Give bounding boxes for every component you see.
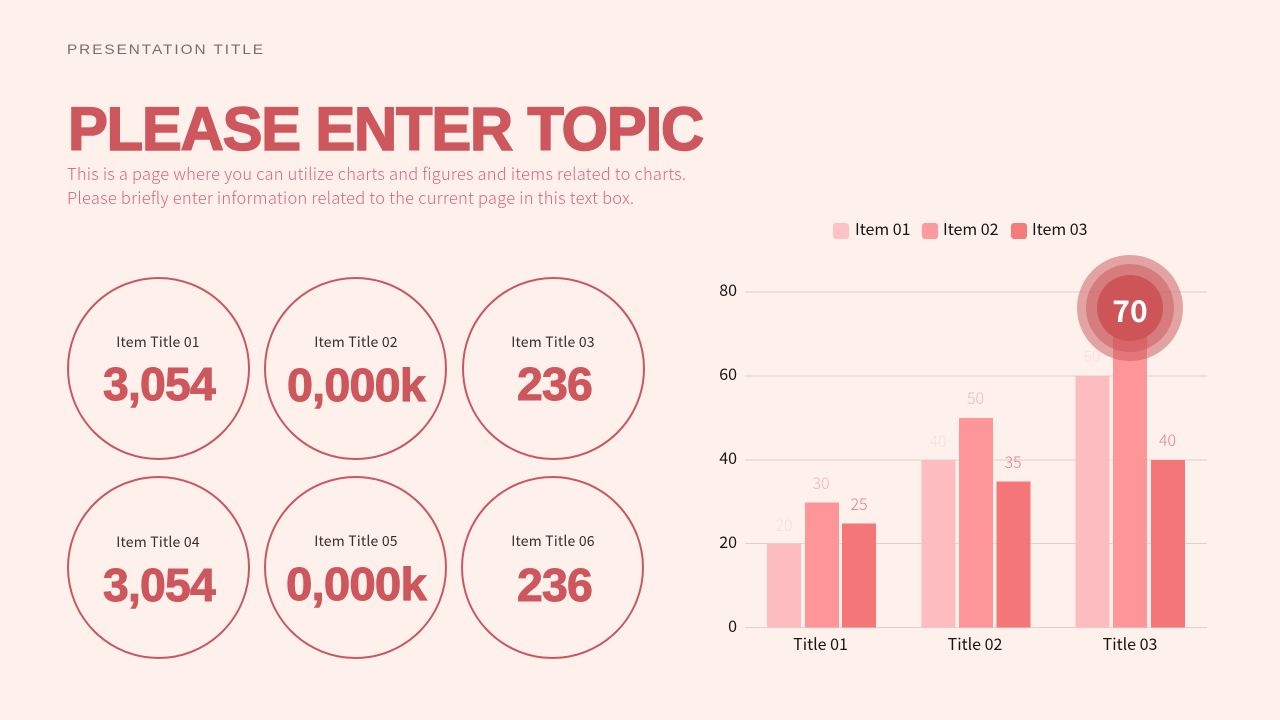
group: Title 01 — [767, 470, 876, 628]
stat circle 01: 3,054 — [103, 358, 216, 410]
group: Title 02: 35 — [1004, 449, 1022, 473]
stat circle 03 — [463, 278, 644, 459]
stat circle 02: 0,000k — [287, 359, 426, 411]
chart legend: Item 02 — [943, 216, 999, 240]
group: Title 03: 60 — [1083, 343, 1101, 367]
x axis labels: Title 01 — [793, 631, 848, 655]
stat circle 04: 3,054 — [103, 559, 216, 611]
x axis labels: Title 03 — [1103, 631, 1157, 655]
stat circle 01 — [68, 278, 249, 459]
y axis labels: 60 — [719, 361, 737, 385]
y axis labels: 20 — [719, 529, 737, 553]
description text: This is a page where you can utilize charts and figures and items related to charts. — [67, 161, 686, 185]
stat circle 06: 236 — [517, 559, 592, 611]
group: Title 02: 40 — [929, 428, 947, 452]
callout: peak value 70 — [1077, 255, 1183, 361]
group: Title 01: 25 — [850, 491, 868, 515]
panel: stat circles — [68, 278, 644, 658]
description text: Please briefly enter information related to the current page in this text box. — [67, 185, 634, 209]
chart legend — [833, 216, 1088, 240]
y axis labels: 80 — [719, 277, 737, 301]
group: Title 02: 50 — [967, 385, 984, 409]
stat circle 05: Item Title 05 — [314, 531, 398, 551]
group: Title 03: 40 — [1159, 427, 1176, 451]
description text — [67, 161, 686, 209]
group: Title 03 — [1076, 334, 1185, 628]
stat circle 05: 0,000k — [286, 558, 427, 610]
group: Title 02 — [922, 385, 1030, 628]
stat circle 03: Item Title 03 — [511, 332, 595, 352]
main heading: PLEASE ENTER TOPIC — [68, 95, 703, 163]
bar chart — [719, 277, 1207, 655]
y axis labels: 0 — [728, 613, 737, 637]
stat circle 02: Item Title 02 — [314, 332, 398, 352]
x axis labels: Title 02 — [948, 631, 1002, 655]
stat circle 04 — [68, 477, 249, 658]
y axis labels: 40 — [719, 445, 737, 469]
x axis labels — [793, 631, 1157, 655]
stat circle 03: 236 — [517, 358, 592, 410]
stat circle 05 — [265, 477, 446, 658]
stat circle 06 — [462, 477, 643, 658]
stat circle 06: Item Title 06 — [511, 531, 595, 551]
chart legend: Item 01 — [855, 216, 911, 240]
y axis labels — [719, 277, 737, 637]
group: Title 01: 30 — [812, 470, 830, 494]
stat circle 02 — [265, 278, 446, 459]
group: Title 01: 20 — [775, 512, 793, 536]
stat circle 04: Item Title 04 — [116, 532, 200, 552]
callout: peak value 70: 70 — [1112, 287, 1148, 331]
chart legend: Item 03 — [1032, 216, 1088, 240]
presentation title: PRESENTATION TITLE — [67, 41, 265, 57]
stat circle 01: Item Title 01 — [116, 332, 200, 352]
